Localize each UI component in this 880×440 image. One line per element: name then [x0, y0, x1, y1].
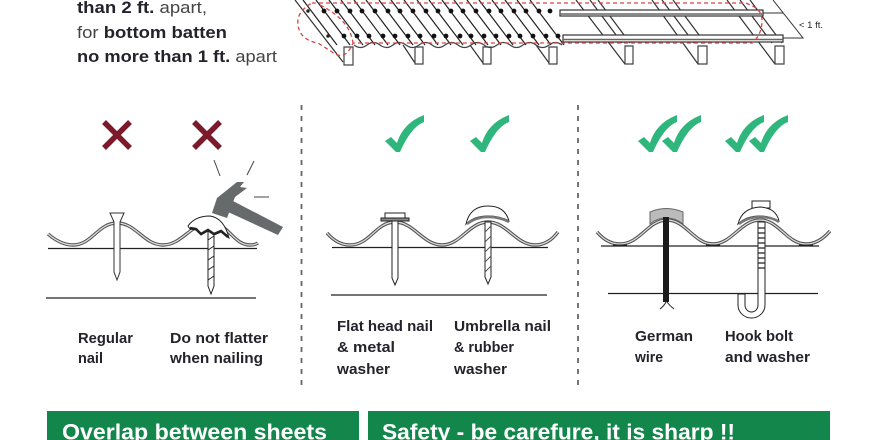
impact lines: [214, 160, 269, 197]
caption: do not flatter: when nailing: [169, 350, 263, 367]
bottom batten: [563, 35, 783, 42]
icon: double check 2: [725, 115, 788, 152]
nails top row: [324, 9, 550, 13]
caption: umbrella nail: washer: [453, 361, 507, 378]
corrugated sheet: [597, 220, 830, 246]
nails bottom row: [344, 34, 558, 38]
corrugated sheet: [48, 223, 258, 245]
panel: wrong nails: [46, 122, 283, 367]
caption: german wire: [634, 328, 693, 366]
caption: umbrella nail: & rubber: [454, 339, 514, 356]
umbrella nail with rubber washer: [466, 206, 509, 284]
caption: regular nail: Regular: [78, 330, 133, 347]
flat head nail with washer: [381, 213, 409, 285]
top batten: [560, 10, 763, 16]
caption: hook bolt: Hook bolt: [725, 328, 793, 345]
heading: safety: [368, 411, 830, 440]
icon: double check 1: [638, 115, 701, 152]
beams: [601, 246, 819, 294]
caption: do not flatter: [169, 330, 268, 367]
caption: regular nail: nail: [78, 350, 103, 367]
caption: umbrella nail: [453, 318, 551, 378]
panel: recommended fixings: [597, 115, 830, 366]
caption: german wire: wire: [634, 349, 663, 366]
sheet corrugation lines: [303, 0, 564, 45]
heading: overlap between sheets: [47, 411, 359, 440]
intro text: batten spacing: no more than 1 ft. apart: [77, 47, 277, 66]
panel: acceptable nails: [327, 115, 558, 378]
bent umbrella nail: [188, 216, 229, 294]
red dashed outline: [298, 3, 762, 55]
beams: [46, 248, 257, 298]
beams: [331, 248, 548, 295]
posts: [344, 46, 784, 65]
caption: flat head nail: & metal: [337, 339, 395, 356]
caption: flat head nail: [336, 318, 433, 378]
intro text: batten spacing: [77, 0, 277, 66]
divider right: [577, 105, 579, 390]
rafters: [295, 0, 782, 64]
label: less than 1 ft: < 1 ft.: [799, 20, 823, 31]
icon: cross 1: [104, 122, 130, 148]
spacing frame: [763, 0, 803, 38]
caption: umbrella nail: Umbrella nail: [454, 318, 551, 335]
roof framing diagram: [295, 0, 803, 65]
intro text: batten spacing: for bottom batten: [77, 23, 227, 42]
caption: hook bolt: [725, 328, 810, 366]
icon: hammer: [212, 182, 283, 235]
caption: flat head nail: Flat head nail: [337, 318, 433, 335]
caption: regular nail: [78, 330, 133, 367]
caption: flat head nail: washer: [336, 361, 390, 378]
regular nail: [110, 213, 124, 280]
icon: check 2: [470, 115, 509, 152]
corrugated sheet: [327, 222, 558, 245]
icon: check 1: [385, 115, 424, 152]
caption: hook bolt: and washer: [725, 349, 810, 366]
divider left: [300, 105, 302, 390]
hook bolt with washer: [738, 201, 779, 318]
german wire: [650, 208, 683, 309]
caption: german wire: German: [635, 328, 693, 345]
icon: cross 2: [194, 122, 220, 148]
sheet wavy lower edge: [354, 42, 562, 48]
caption: do not flatter: Do not flatter: [170, 330, 268, 347]
